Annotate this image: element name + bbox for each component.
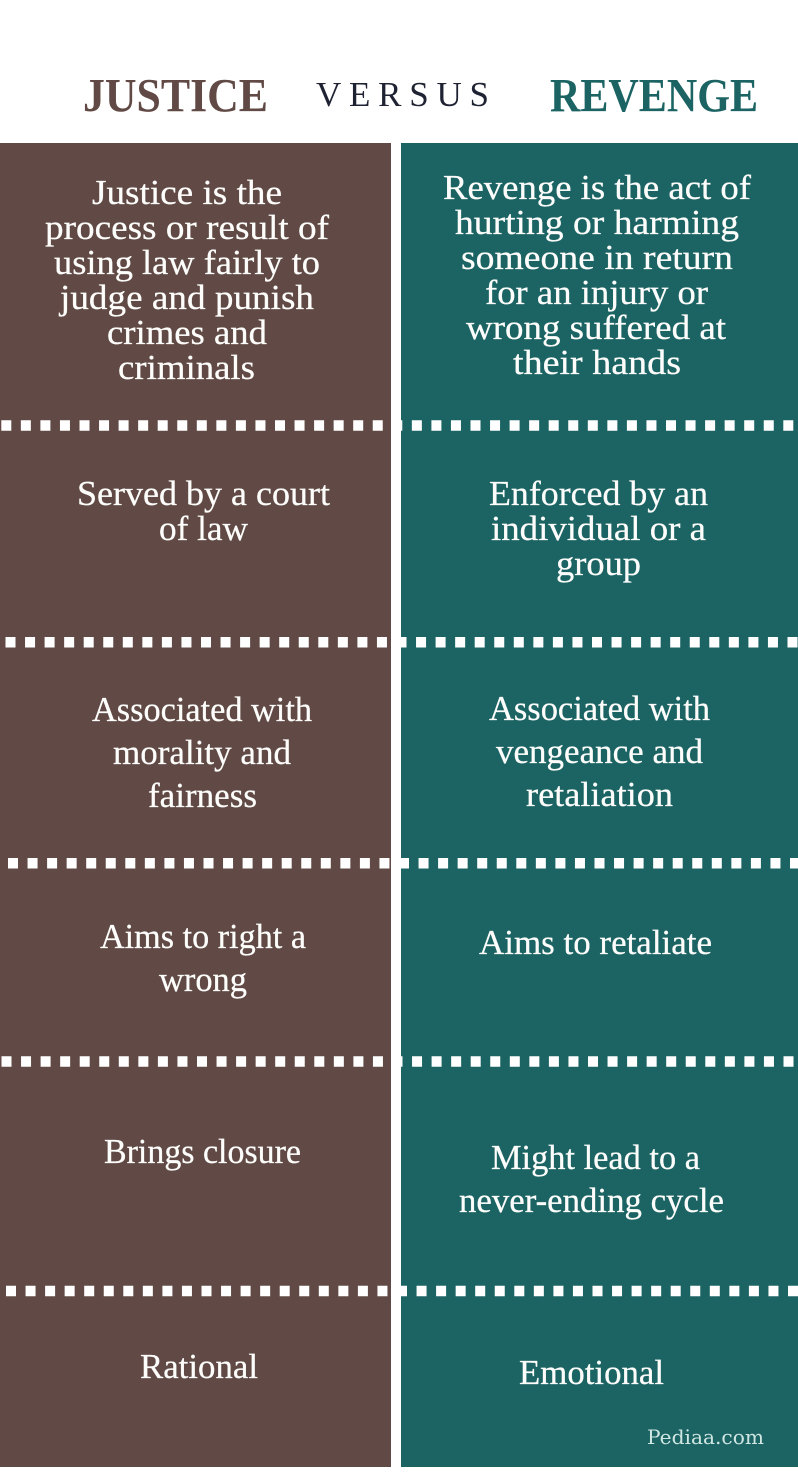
text block: justice nature: Rational <box>140 1347 258 1386</box>
text block: justice definition: using law fairly to <box>54 243 320 282</box>
text block: revenge enforcement: Enforced by an <box>489 474 708 513</box>
text block: revenge definition: for an injury or <box>485 273 708 312</box>
panel: justice column background <box>0 143 391 1467</box>
text block: revenge definition <box>443 168 751 382</box>
text block: revenge nature: Emotional <box>519 1353 664 1392</box>
text block: revenge definition: someone in return <box>461 238 733 277</box>
text block: revenge association: retaliation <box>526 775 673 814</box>
text block: revenge association <box>489 689 710 814</box>
text block: revenge aim: Aims to retaliate <box>479 923 712 962</box>
text block: justice enforcement <box>77 474 330 548</box>
text block: revenge outcome <box>459 1138 724 1220</box>
text block: justice definition <box>45 173 329 387</box>
text block: justice association <box>92 690 312 815</box>
text block: justice association: Associated with <box>92 690 312 729</box>
text block: justice aim <box>100 917 306 999</box>
watermark: Pediaa.com: Pediaa.com <box>647 1425 764 1449</box>
text block: justice definition: Justice is the <box>92 173 282 212</box>
text block: revenge enforcement: individual or a <box>491 509 706 548</box>
text block: justice aim: Aims to right a <box>100 917 306 956</box>
text block: revenge enforcement: group <box>556 544 641 583</box>
panel: revenge column background <box>401 143 798 1467</box>
text block: justice outcome: Brings closure <box>104 1132 301 1171</box>
text block: revenge definition: Revenge is the act of <box>443 168 751 207</box>
text block: justice enforcement: of law <box>159 509 249 548</box>
text block: justice definition: criminals <box>118 348 255 387</box>
title: versus: VERSUS <box>316 75 489 114</box>
text block: justice definition: crimes and <box>107 313 268 352</box>
text block: justice association: fairness <box>148 776 257 815</box>
text block: revenge outcome: Might lead to a <box>491 1138 700 1177</box>
text block: revenge association: Associated with <box>489 689 710 728</box>
text block: justice definition: process or result of <box>45 208 329 247</box>
text block: revenge definition: their hands <box>513 343 681 382</box>
text block: revenge association: vengeance and <box>496 732 703 771</box>
text block: justice enforcement: Served by a court <box>77 474 330 513</box>
title: justice: JUSTICE <box>83 70 268 122</box>
text block: revenge definition: wrong suffered at <box>466 308 726 347</box>
text block: revenge enforcement <box>489 474 708 583</box>
text block: justice association: morality and <box>113 733 291 772</box>
text block: revenge outcome: never-ending cycle <box>459 1181 724 1220</box>
text block: justice definition: judge and punish <box>58 278 315 317</box>
text block: revenge definition: hurting or harming <box>455 203 739 242</box>
title: revenge: REVENGE <box>550 70 758 122</box>
text block: justice aim: wrong <box>159 960 247 999</box>
